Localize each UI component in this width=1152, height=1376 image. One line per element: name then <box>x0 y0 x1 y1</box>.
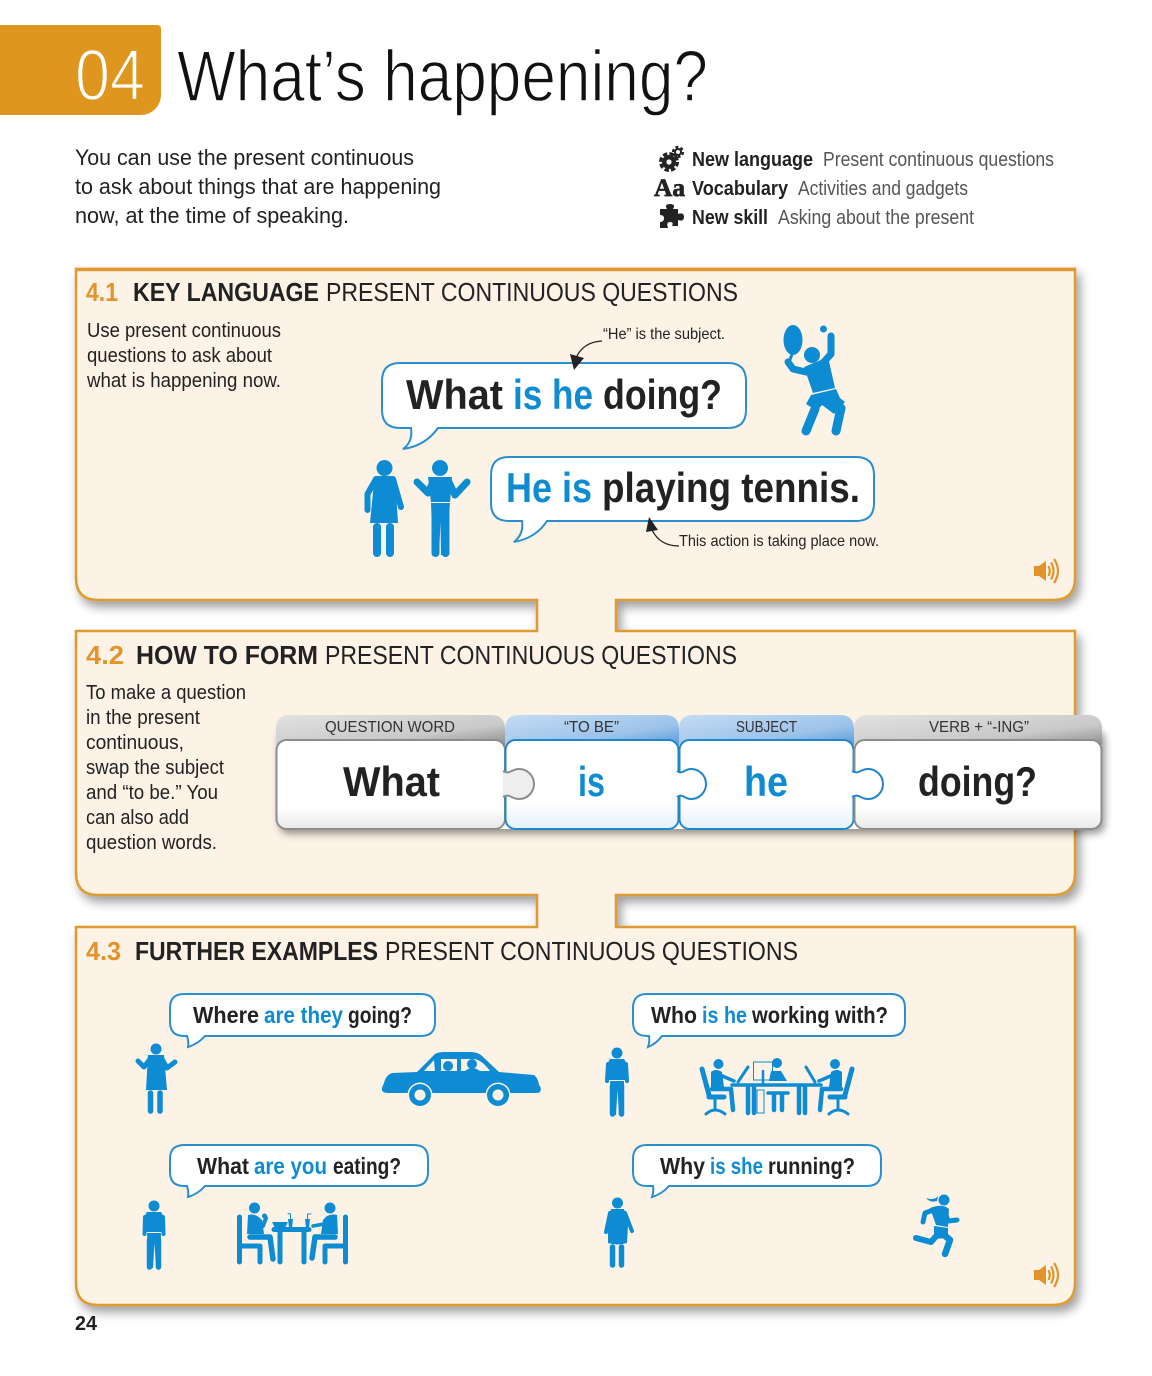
heading 4.3: PRESENT CONTINUOUS QUESTIONS <box>385 936 798 966</box>
puzzle piece: subject: SUBJECT <box>736 719 797 736</box>
speech bubble: answer: He is <box>506 464 592 511</box>
speech bubble: question: doing? <box>603 371 722 418</box>
speech bubble: where are they going <box>170 994 435 1047</box>
puzzle piece: subject <box>677 715 854 829</box>
chapter number tab <box>0 25 161 116</box>
heading 4.2: HOW TO FORM <box>136 640 318 670</box>
puzzle piece: to be <box>503 715 679 829</box>
puzzle piece: verb: VERB + “-ING” <box>929 719 1029 736</box>
learning objectives: Vocabulary <box>692 178 789 200</box>
speech bubble: who is he working with: Who <box>651 1002 697 1028</box>
learning objectives: Asking about the present <box>778 207 974 229</box>
speech bubble: who is he working with <box>633 994 905 1047</box>
panel: 4.3 further examples <box>76 927 1075 1305</box>
speech bubble: what are you eating: eating? <box>333 1153 401 1179</box>
puzzle piece: question word <box>276 715 505 829</box>
intro text: You can use the present continuous <box>75 145 414 170</box>
panel: 4.2 how to form <box>76 631 1102 895</box>
icon: people eating at a table <box>240 1202 346 1262</box>
panel: 4.1 key language <box>76 269 1076 600</box>
learning objectives: Present continuous questions <box>823 149 1054 171</box>
speech bubble: where are they going: are they <box>264 1002 343 1028</box>
icon: Aa: Aa <box>654 175 685 202</box>
icon: runner <box>916 1194 957 1254</box>
annotation: action taking place now: This action is taking place now. <box>679 533 879 550</box>
speech bubble: answer: playing tennis. <box>602 464 860 511</box>
heading 4.2: 4.2 <box>86 640 124 670</box>
puzzle piece: question word: What <box>343 758 440 805</box>
annotation: he is the subject <box>570 326 725 370</box>
icon: woman <box>606 1198 632 1265</box>
speech bubble: what are you eating <box>170 1145 428 1197</box>
puzzle piece: verb: doing? <box>918 758 1037 805</box>
heading 4.3: FURTHER EXAMPLES <box>135 936 378 966</box>
explanation text <box>86 320 281 392</box>
explanation text: and “to be.” You <box>86 782 218 804</box>
heading 4.1: 4.1 <box>86 277 118 307</box>
icon: man <box>144 1200 164 1268</box>
speech bubble: why is she running: running? <box>768 1153 855 1179</box>
learning objectives: New skill <box>692 207 768 229</box>
explanation text: continuous, <box>86 732 184 754</box>
explanation text: can also add <box>86 807 189 829</box>
heading 4.1: PRESENT CONTINUOUS QUESTIONS <box>326 277 738 307</box>
icon: puzzle piece <box>660 204 684 228</box>
panel frame <box>76 269 1075 1305</box>
learning objectives: Activities and gadgets <box>798 178 968 200</box>
speech bubble: what are you eating: are you <box>254 1153 327 1179</box>
puzzle piece: subject: he <box>744 758 788 805</box>
title: What’s happening? <box>177 37 708 117</box>
speech bubble: why is she running: is she <box>710 1153 763 1179</box>
speech bubble: answer <box>491 457 874 542</box>
explanation text: Use present continuous <box>87 320 281 342</box>
heading 4.3: 4.3 <box>86 936 121 966</box>
annotation: he is the subject: “He” is the subject. <box>603 326 725 343</box>
explanation text: question words. <box>86 832 217 854</box>
heading 4.2: PRESENT CONTINUOUS QUESTIONS <box>325 640 737 670</box>
icon: audio <box>1034 1263 1058 1287</box>
icon: man shrugging <box>417 460 467 555</box>
explanation text <box>86 682 246 854</box>
puzzle piece: verb <box>852 715 1102 829</box>
heading 4.1: KEY LANGUAGE <box>133 277 319 307</box>
intro text <box>75 145 441 228</box>
speech bubble: why is she running <box>633 1145 881 1197</box>
speech bubble: question: is he <box>513 371 593 418</box>
icon: gears <box>660 147 683 170</box>
icon: office workers <box>702 1058 852 1114</box>
explanation text: in the present <box>86 707 200 729</box>
puzzle piece: to be: is <box>578 758 605 805</box>
speech bubble: who is he working with: is he <box>702 1002 747 1028</box>
speech bubble: question: What <box>406 371 503 418</box>
explanation text: swap the subject <box>86 757 224 779</box>
puzzle piece: question word: QUESTION WORD <box>325 719 455 736</box>
speech bubble: where are they going: Where <box>193 1002 259 1028</box>
speech bubble: what are you eating: What <box>197 1153 249 1179</box>
intro text: to ask about things that are happening <box>75 174 441 199</box>
puzzle piece: to be: “TO BE” <box>564 719 619 736</box>
explanation text: To make a question <box>86 682 246 704</box>
speech bubble: why is she running: Why <box>660 1153 705 1179</box>
speech bubble: question <box>382 363 746 449</box>
page number: 24 <box>75 1313 98 1335</box>
formula puzzle <box>276 715 1102 829</box>
icon: audio <box>1034 559 1058 583</box>
icon: man <box>607 1048 627 1115</box>
annotation: action taking place now <box>646 517 879 550</box>
icon: car <box>382 1052 541 1108</box>
learning objectives: New language <box>692 149 813 171</box>
intro text: now, at the time of speaking. <box>75 203 349 228</box>
speech bubble: who is he working with: working with? <box>751 1002 888 1028</box>
heading 4.3 <box>86 936 798 966</box>
heading 4.2 <box>86 640 737 670</box>
icon: tennis player <box>784 325 845 431</box>
chapter number tab: 04 <box>75 36 145 116</box>
learning objectives <box>654 147 1054 229</box>
explanation text: what is happening now. <box>86 370 281 392</box>
explanation text: questions to ask about <box>87 345 272 367</box>
speech bubble: where are they going: going? <box>348 1002 412 1028</box>
icon: woman <box>368 460 401 553</box>
icon: woman shrugging <box>138 1044 175 1111</box>
heading 4.1 <box>86 277 738 307</box>
